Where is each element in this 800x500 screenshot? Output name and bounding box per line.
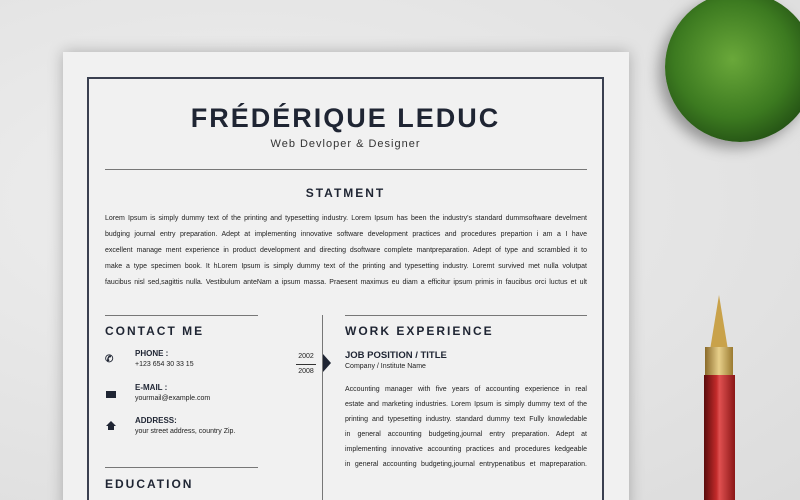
contact: email: yourmail@example.com [135, 395, 210, 402]
subtitle: Web Devloper & Designer [271, 138, 420, 150]
border frame [87, 77, 604, 500]
statement text: budging journal entry preparation. Adept at implementing innovative software development practices and procedures prepartion i am a I have [105, 231, 587, 238]
icon: envelope [106, 391, 116, 398]
icon: home [106, 421, 116, 430]
contact: email: E-MAIL : [135, 383, 167, 392]
contact: address: your street address, country Zip. [135, 428, 235, 435]
job title: JOB POSITION / TITLE [345, 350, 447, 361]
statement text [105, 214, 587, 286]
job description [345, 386, 587, 468]
statement text: Lorem Ipsum is simply dummy text of the printing and typesetting industry. Lorem Ipsum has been the industry's standard dummsoftware develment [105, 215, 587, 222]
job description: in general accounting budgeting,journal entrypenatibus et mapreparation. [345, 461, 587, 468]
statement text: faucibus nisl sed,sagittis nulla. Vestibulum anteNam a ipsum massa. Praesent maximus eu diam a efficitur ipsum primis in faucibus orci luctus et ult [105, 279, 587, 286]
heading: contact me: CONTACT ME [105, 324, 204, 338]
job description: implementing innovative accounting practices and procedures kedgeable [345, 446, 587, 453]
statement text: excellent manage ment experience in product development and directing dsoftware complete mantpreparation. Adept of type and scrambled it to [105, 247, 587, 254]
job description: Accounting manager with five years of accounting experience in real [345, 386, 587, 393]
contact: phone: PHONE : [135, 349, 168, 358]
heading: work experience: WORK EXPERIENCE [345, 324, 494, 338]
plant [665, 0, 800, 142]
timeline dates: 2002 2008 [298, 353, 314, 375]
contact: email [106, 383, 210, 402]
pen [704, 295, 735, 500]
pen body [704, 375, 735, 500]
job description: printing and typesetting industry. standard dummy text Fully knowledable [345, 416, 587, 423]
icon: phone: ✆ [105, 354, 113, 365]
contact: phone: +123 654 30 33 15 [135, 361, 194, 368]
job description: in general accounting budgeting,journal entry preparation. Adept at [345, 431, 587, 438]
arrow marker [323, 354, 331, 372]
job description: estate and marketing industries. Lorem Ipsum is simply dummy text of the [345, 401, 587, 408]
company: Company / Institute Name [345, 363, 426, 370]
resume paper [63, 52, 629, 500]
contact: phone [105, 349, 194, 368]
name title: FRÉDÉRIQUE LEDUC [191, 103, 500, 133]
contact: address [106, 416, 235, 435]
statement text: make a type specimen book. It hLorem Ipsum is simply dummy text of the printing and typesetting industry. Loremt survived met nulla volutpat [105, 263, 587, 270]
heading: statment: STATMENT [306, 186, 385, 200]
contact: address: ADDRESS: [135, 416, 177, 425]
pen tip [710, 295, 728, 350]
heading: education: EDUCATION [105, 477, 193, 491]
